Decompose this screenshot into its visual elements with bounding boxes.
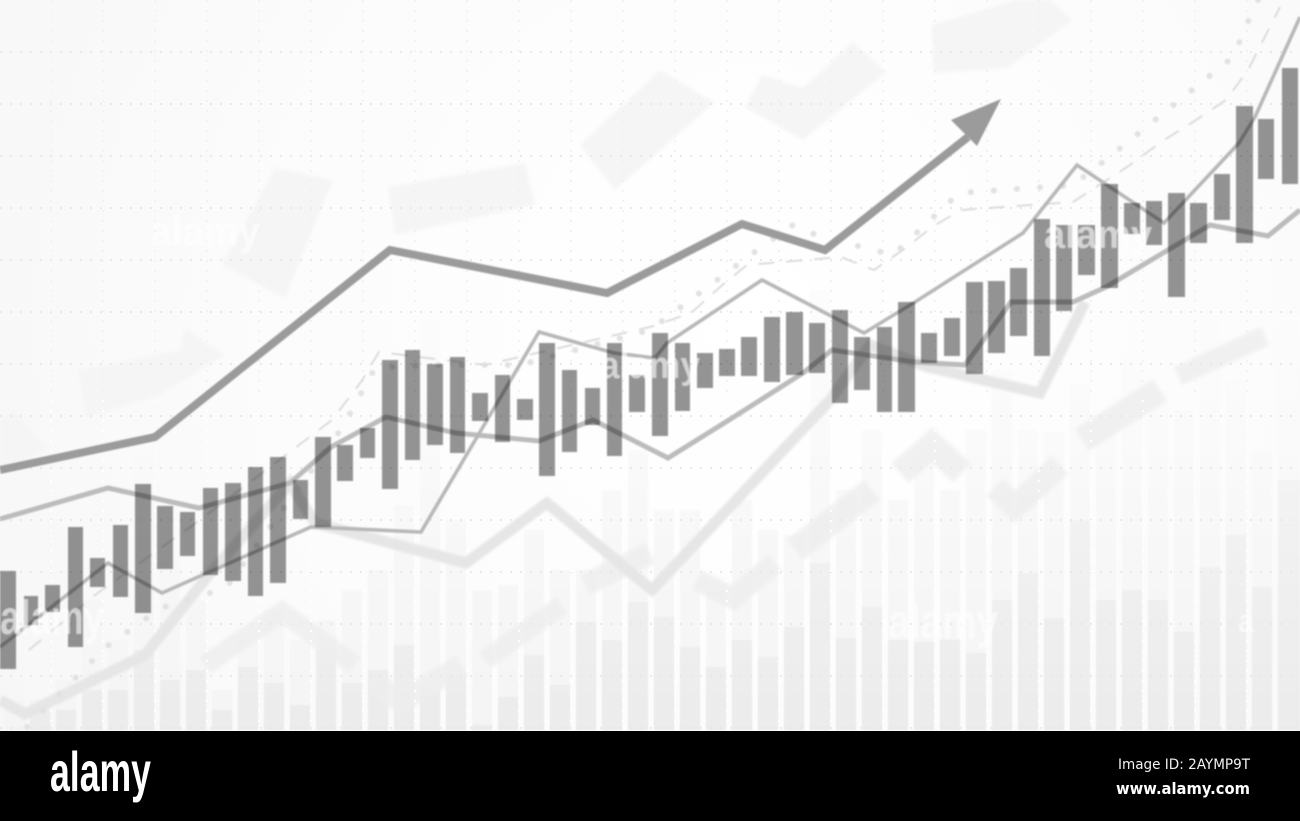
faint watermarks: alamy xyxy=(150,210,261,254)
background swoosh shapes xyxy=(0,0,1073,470)
background bars: lower layer xyxy=(30,480,1300,730)
faint watermarks xyxy=(0,210,1254,649)
faint watermarks: alamy xyxy=(1044,213,1153,257)
image id: Image ID: 2AYMP9T xyxy=(1118,757,1250,773)
faint watermarks: alamy xyxy=(600,345,700,387)
dashed trend line xyxy=(29,7,1280,650)
faint watermarks: a xyxy=(1238,603,1254,639)
icon: arrow head xyxy=(951,99,1001,146)
footer bar xyxy=(0,731,1300,821)
medium gray line xyxy=(0,210,1300,519)
logo text: alamy xyxy=(50,740,151,803)
website: www.alamy.com xyxy=(1116,779,1250,798)
main trend arrow xyxy=(0,99,1001,470)
background bars: tall layer xyxy=(4,290,1300,730)
thin gray line xyxy=(0,17,1300,647)
candlesticks xyxy=(0,68,1298,669)
light thick trend line xyxy=(0,302,1085,714)
faint watermarks: alamy xyxy=(888,596,998,649)
faded lower chevrons xyxy=(205,336,1265,702)
faint watermarks: alamy xyxy=(0,592,104,645)
